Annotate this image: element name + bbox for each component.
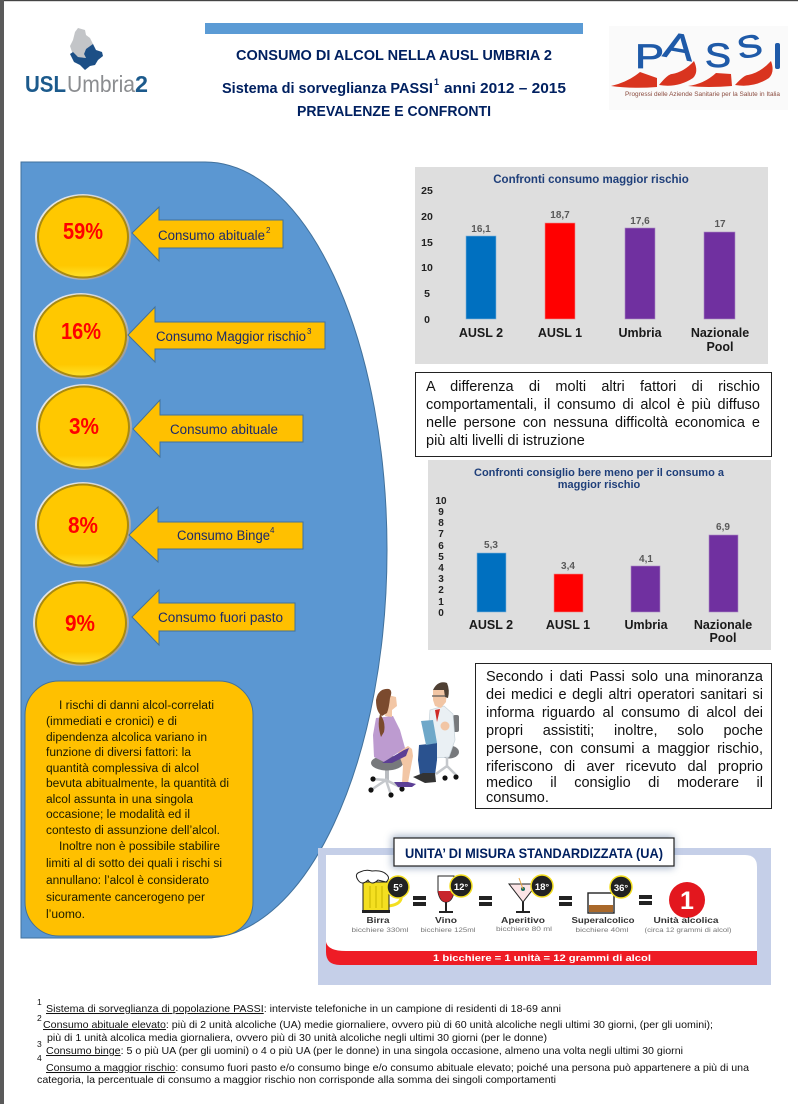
title block: 1 bbox=[434, 77, 439, 87]
logo: USL Umbria 2: 2 bbox=[135, 71, 148, 97]
icon: aperitivo: 18° bbox=[535, 882, 549, 893]
icon: birra: bicchiere 330ml bbox=[352, 927, 409, 934]
bar chart: confronti consumo maggior rischio bbox=[415, 167, 768, 364]
patient head bbox=[385, 695, 397, 717]
bar chart: confronti consiglio bere meno: 4,1 bbox=[639, 554, 653, 565]
heading: unità di misura bbox=[392, 836, 674, 868]
doctor head bbox=[433, 690, 447, 708]
text box: dati Passi sui medici: persone, con consumi a maggior rischio, bbox=[486, 741, 763, 757]
heading: unità di misura: UNITA’ DI MISURA STANDARDIZZATA (UA) bbox=[405, 845, 663, 861]
bar chart: confronti consiglio bere meno: maggior rischio bbox=[558, 479, 641, 491]
callout: rischi alcol-correlati: contesto di assunzione dell’alcol. bbox=[46, 825, 220, 837]
patient stool bbox=[385, 768, 389, 782]
icon: unità alcolica: 1 bbox=[680, 887, 694, 915]
text box: dati Passi sui medici: consumo. bbox=[486, 790, 549, 806]
patient body bbox=[373, 716, 405, 762]
icon: vino: bicchiere 125ml bbox=[420, 927, 476, 934]
footnotes bbox=[37, 997, 749, 1086]
indicator: 16% consumo maggior rischio bbox=[33, 293, 325, 379]
doctor stool bbox=[453, 715, 459, 732]
footnotes: Consumo abituale elevato : più di 2 unità alcoliche (UA) medie giornaliere, ovvero più di 60 unità alcoliche negli ultimi 30 giorni, (per gli uomini); bbox=[43, 1020, 713, 1031]
logo: USL Umbria 2 bbox=[25, 28, 148, 97]
bar chart: confronti consiglio bere meno: 8 bbox=[438, 518, 444, 529]
icon: unità alcolica: Unità alcolica bbox=[654, 915, 719, 925]
indicator: 8% consumo binge: 4 bbox=[270, 526, 275, 535]
bar chart: confronti consiglio bere meno: 3 bbox=[438, 574, 444, 585]
icon: aperitivo: Aperitivo bbox=[501, 915, 545, 925]
icon: unità alcolica: (circa 12 grammi di alcol) bbox=[644, 927, 732, 934]
bar chart: confronti consiglio bere meno: AUSL 2 bbox=[469, 618, 513, 632]
text box: dati Passi sui medici bbox=[475, 663, 772, 809]
bar chart: confronti consumo maggior rischio: 17,6 bbox=[630, 216, 650, 227]
logo: PASSI: S bbox=[734, 27, 765, 66]
patient legs bbox=[398, 746, 413, 783]
footnotes: 4 bbox=[37, 1053, 42, 1063]
footnotes: 1 bbox=[37, 997, 42, 1007]
indicator: 16% consumo maggior rischio: 16% bbox=[61, 318, 101, 344]
indicator: 8% consumo binge bbox=[35, 482, 303, 568]
icon: aperitivo: bicchiere 80 ml bbox=[496, 926, 553, 933]
logo: PASSI bbox=[609, 24, 788, 110]
icon: vino: Vino bbox=[435, 915, 457, 925]
icon: uguale bbox=[559, 896, 572, 906]
bar chart: confronti consumo maggior rischio: Nazionale bbox=[691, 326, 749, 340]
callout: rischi alcol-correlati bbox=[25, 681, 253, 936]
logo: PASSI: A bbox=[661, 24, 697, 69]
icon: aperitivo bbox=[496, 875, 553, 933]
bar chart: confronti consiglio bere meno: 6 bbox=[438, 541, 444, 552]
logo: PASSI: P bbox=[635, 38, 664, 76]
bar chart: confronti consumo maggior rischio: 17 bbox=[714, 219, 726, 230]
illustration: medico e paziente bbox=[368, 682, 459, 798]
icon: uguale bbox=[413, 896, 426, 906]
bar chart: confronti consumo maggior rischio: 16,1 bbox=[471, 224, 491, 235]
text box: fattori di rischio comportamentali: A differenza di molti altri fattori di rischio bbox=[426, 379, 760, 395]
bar chart: confronti consiglio bere meno: 0 bbox=[438, 608, 444, 619]
icon: unità alcolica bbox=[644, 882, 732, 934]
logo: PASSI: Progressi delle Aziende Sanitarie per la Salute in Italia bbox=[625, 91, 780, 98]
bar chart: confronti consiglio bere meno: Umbria bbox=[624, 618, 669, 632]
indicator: 3% consumo abituale: 3% bbox=[69, 413, 99, 439]
panel: unità di misura standardizzata: 1 bicchiere = 1 unità = 12 grammi di alcol bbox=[433, 953, 651, 964]
bar chart: confronti consumo maggior rischio: 18,7 bbox=[550, 210, 570, 221]
bar chart: confronti consiglio bere meno: 6,9 bbox=[716, 522, 730, 533]
callout: rischi alcol-correlati: quantità complessiva di alcol bbox=[46, 763, 199, 775]
text box: dati Passi sui medici: dei medici e degli altri operatori sanitari si bbox=[486, 687, 763, 703]
indicator: 3% consumo abituale bbox=[36, 384, 303, 470]
bar chart: confronti consiglio bere meno: 7 bbox=[438, 529, 444, 540]
callout: rischi alcol-correlati: I rischi di danni alcol-correlati bbox=[59, 700, 214, 712]
footnotes: Sistema di sorveglianza di popolazione PASSI : interviste telefoniche in un campione di residenti di 18-69 anni bbox=[46, 1004, 561, 1015]
indicator: 8% consumo binge: Consumo Binge bbox=[177, 528, 270, 543]
logo: USL Umbria 2: Umbria bbox=[67, 71, 136, 97]
indicator: 59% consumo abituale: Consumo abituale bbox=[158, 228, 265, 243]
text box: dati Passi sui medici: Secondo i dati Passi solo una minoranza bbox=[486, 669, 763, 685]
title block: Sistema di sorveglianza PASSI bbox=[222, 81, 433, 97]
icon: uguale bbox=[639, 895, 652, 905]
icon: superalcolico bbox=[572, 876, 634, 934]
footnotes: Consumo a maggior rischio : consumo fuori pasto e/o consumo binge e/o consumo abituale elevato; poiché una persona può appartenere a più di una bbox=[46, 1063, 749, 1074]
text box: dati Passi sui medici: propri assistiti; inoltre, solo poche bbox=[486, 723, 763, 739]
title block: anni 2012 – 2015 bbox=[444, 81, 566, 97]
panel: prevalenze bbox=[21, 162, 387, 938]
callout: rischi alcol-correlati: l’uomo. bbox=[46, 909, 85, 921]
bar chart: confronti consumo maggior rischio: 25 bbox=[421, 185, 433, 197]
indicator: 9% consumo fuori pasto: Consumo fuori pasto bbox=[158, 610, 283, 625]
icon: birra: Birra bbox=[366, 915, 390, 925]
callout: rischi alcol-correlati: occasione; le modalità ed il bbox=[46, 809, 190, 821]
footnotes: 3 bbox=[37, 1039, 42, 1049]
icon: birra: 5° bbox=[393, 883, 403, 894]
icon: superalcolico: Superalcolico bbox=[572, 915, 634, 925]
icon: superalcolico: 36° bbox=[614, 883, 628, 894]
bar chart: confronti consiglio bere meno: 3,4 bbox=[561, 561, 575, 572]
icon: uguale bbox=[479, 896, 492, 906]
indicator: 59% consumo abituale: 59% bbox=[63, 218, 103, 244]
title block: PREVALENZE E CONFRONTI bbox=[297, 104, 491, 120]
callout: rischi alcol-correlati: funzione di diversi fattori: la bbox=[46, 747, 192, 759]
text box: dati Passi sui medici: riferiscono di aver ricevuto dal proprio bbox=[486, 759, 763, 775]
indicator: 59% consumo abituale bbox=[35, 194, 283, 280]
callout: rischi alcol-correlati: annullano: l’alcol è considerato bbox=[46, 875, 209, 887]
indicator: 9% consumo fuori pasto bbox=[33, 580, 295, 666]
bar chart: confronti consumo maggior rischio: Confronti consumo maggior rischio bbox=[493, 174, 689, 186]
callout: rischi alcol-correlati: alcol assunta in una singola bbox=[46, 794, 194, 806]
panel: unità di misura standardizzata bbox=[318, 836, 771, 985]
bar chart: confronti consiglio bere meno: AUSL 1 bbox=[546, 618, 590, 632]
bar chart: confronti consumo maggior rischio: 10 bbox=[421, 262, 433, 274]
bar chart: confronti consiglio bere meno: 10 bbox=[435, 496, 447, 507]
callout: rischi alcol-correlati: sicuramente cancerogeno per bbox=[46, 892, 205, 904]
footnotes: categoria, la percentuale di consumo a maggior rischio non corrisponde alla somma dei singoli comportamenti bbox=[37, 1075, 556, 1086]
text box: fattori di rischio comportamentali: più alti livelli di istruzione bbox=[426, 433, 585, 449]
bar chart: confronti consumo maggior rischio: 20 bbox=[421, 211, 433, 223]
text box: dati Passi sui medici: medico il consiglio di moderare il bbox=[486, 775, 763, 791]
icon: vino bbox=[420, 875, 476, 934]
bar chart: confronti consumo maggior rischio: 5 bbox=[424, 288, 430, 300]
bar chart: confronti consiglio bere meno bbox=[428, 460, 771, 650]
callout: rischi alcol-correlati: limiti al di sotto dei quali i rischi si bbox=[46, 858, 222, 870]
bar chart: confronti consumo maggior rischio: AUSL 2 bbox=[459, 326, 503, 340]
bar chart: confronti consiglio bere meno: 2 bbox=[438, 585, 444, 596]
bar chart: confronti consiglio bere meno: Pool bbox=[709, 631, 737, 645]
clipboard bbox=[421, 720, 437, 745]
title block bbox=[205, 23, 583, 120]
bar chart: confronti consumo maggior rischio: Umbria bbox=[618, 326, 663, 340]
icon: superalcolico: bicchiere 40ml bbox=[576, 927, 629, 934]
logo: PASSI: S bbox=[705, 37, 731, 75]
doctor body bbox=[428, 706, 455, 758]
icon: vino: 12° bbox=[454, 882, 468, 893]
callout: rischi alcol-correlati: (immediati e cronici) e di bbox=[46, 716, 177, 728]
footnotes: 2 bbox=[37, 1013, 42, 1023]
indicator: 9% consumo fuori pasto: 9% bbox=[65, 610, 95, 636]
callout: rischi alcol-correlati: dipendenza alcolica variano in bbox=[46, 732, 207, 744]
bar chart: confronti consiglio bere meno: 5 bbox=[438, 552, 444, 563]
bar chart: confronti consiglio bere meno: 9 bbox=[438, 507, 444, 518]
bar chart: confronti consiglio bere meno: Confronti consiglio bere meno per il consumo a bbox=[474, 467, 725, 479]
icon: birra bbox=[352, 870, 409, 934]
logo: USL Umbria 2: USL bbox=[25, 71, 66, 97]
indicator: 3% consumo abituale: Consumo abituale bbox=[170, 422, 278, 437]
text box: fattori di rischio comportamentali bbox=[415, 372, 772, 457]
bar chart: confronti consumo maggior rischio: 15 bbox=[421, 237, 433, 249]
callout: rischi alcol-correlati: Inoltre non è possibile stabilire bbox=[59, 841, 220, 853]
footnotes: Consumo binge : 5 o più UA (per gli uomini) o 4 o più UA (per le donne) in una singola occasione, almeno una volta negli ultimi 30 giorni bbox=[46, 1046, 683, 1057]
bar chart: confronti consiglio bere meno: 5,3 bbox=[484, 540, 498, 551]
text box: fattori di rischio comportamentali: comportamentali, il consumo di alcol è più diffuso bbox=[426, 397, 760, 413]
bar chart: confronti consumo maggior rischio: Pool bbox=[706, 340, 734, 354]
bar chart: confronti consiglio bere meno: 1 bbox=[438, 597, 444, 608]
indicator: 59% consumo abituale: 2 bbox=[266, 226, 271, 235]
title block: CONSUMO DI ALCOL NELLA AUSL UMBRIA 2 bbox=[236, 48, 552, 64]
text box: dati Passi sui medici: informa riguardo al consumo di alcol dei bbox=[486, 705, 763, 721]
bar chart: confronti consiglio bere meno: 4 bbox=[438, 563, 444, 574]
doctor legs bbox=[418, 743, 437, 775]
text box: fattori di rischio comportamentali: nelle persone con nessuna difficoltà economica e bbox=[426, 415, 760, 431]
bar chart: confronti consiglio bere meno: Nazionale bbox=[694, 618, 752, 632]
bar chart: confronti consumo maggior rischio: AUSL 1 bbox=[538, 326, 582, 340]
indicator: 8% consumo binge: 8% bbox=[68, 512, 98, 538]
footnotes: più di 1 unità alcolica media giornaliera, ovvero più di 30 unità alcoliche negli ultimi 30 giorni (per le donne) bbox=[47, 1033, 547, 1044]
indicator: 16% consumo maggior rischio: 3 bbox=[307, 327, 312, 336]
bar chart: confronti consumo maggior rischio: 0 bbox=[424, 314, 430, 326]
callout: rischi alcol-correlati: bevuta abitualmente, la quantità di bbox=[46, 778, 229, 790]
indicator: 16% consumo maggior rischio: Consumo Maggior rischio bbox=[156, 329, 306, 344]
